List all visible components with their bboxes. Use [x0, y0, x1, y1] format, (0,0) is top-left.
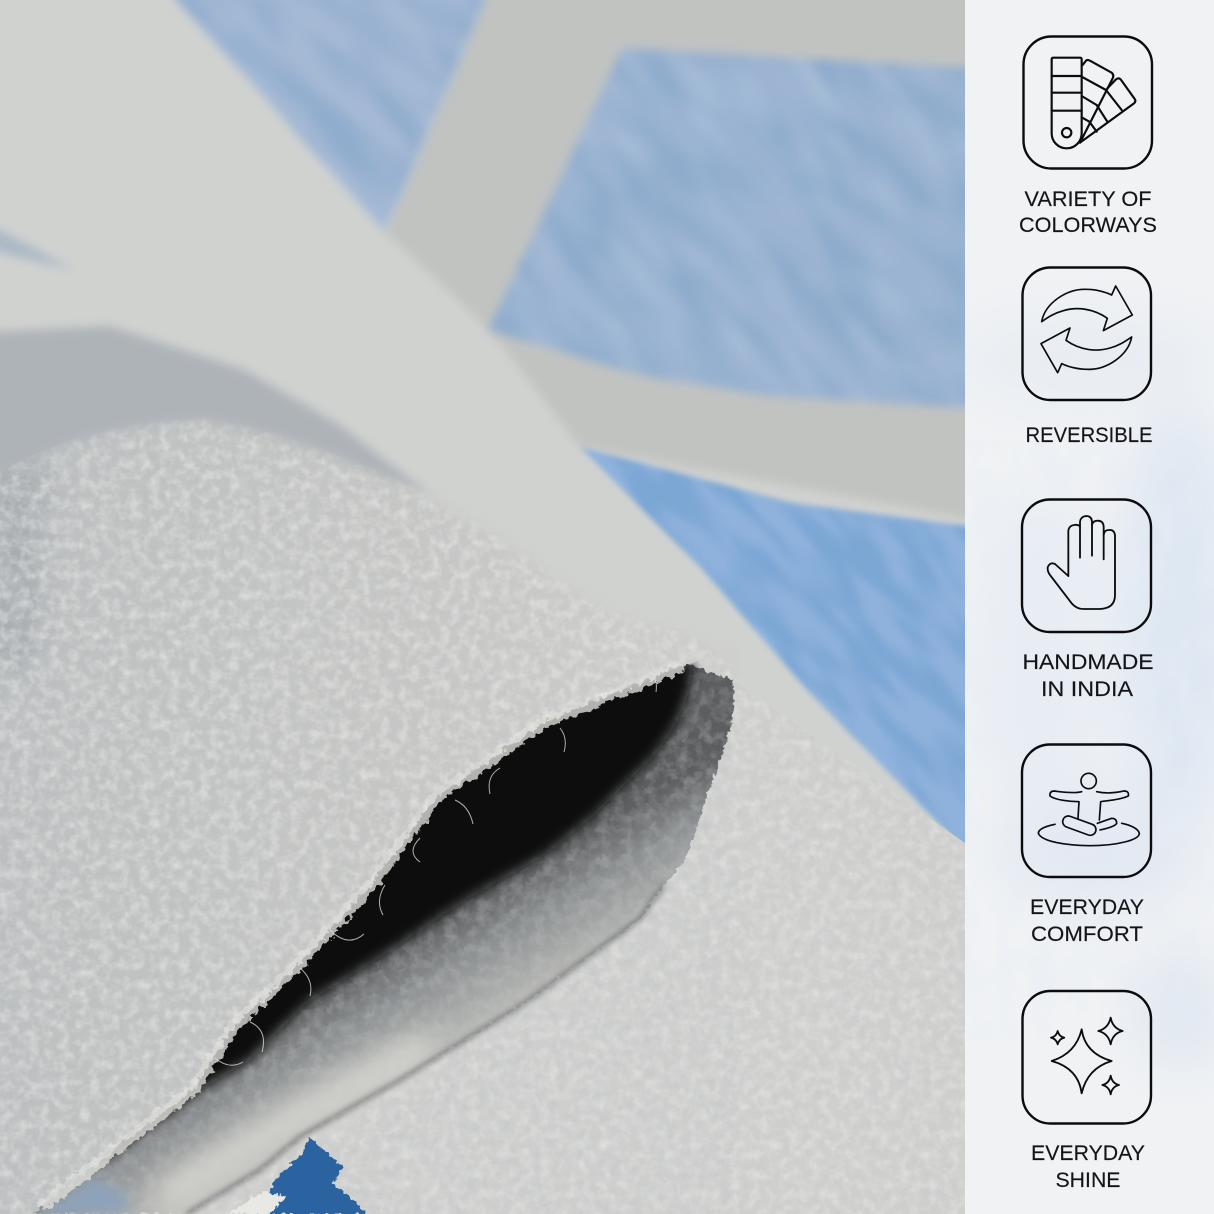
icon: colour fan deck [1052, 58, 1135, 148]
label [1031, 1142, 1145, 1192]
panel background [965, 0, 1214, 1214]
feature: reversible [1022, 268, 1152, 447]
label: COMFORT [1031, 923, 1143, 946]
pale blue patch at the bottom left [38, 1178, 128, 1214]
feature: variety of colorways [1019, 36, 1157, 237]
icon: reversing arrows [1041, 286, 1132, 373]
label: EVERYDAY [1031, 1142, 1145, 1165]
label: VARIETY OF [1024, 188, 1152, 211]
stray fibres on the fold edge [215, 672, 656, 1065]
feature: everyday shine [1022, 991, 1151, 1192]
panel: features sidebar [960, 0, 1214, 1214]
label: SHINE [1056, 1169, 1120, 1192]
large blue diamond [486, 44, 965, 411]
icon frame [1022, 268, 1151, 400]
label: EVERYDAY [1030, 896, 1144, 919]
top blue diamond [170, 0, 489, 232]
contact shadow under the band [187, 885, 664, 1214]
fold shading on the left [0, 450, 45, 680]
label: HANDMADE [1022, 651, 1154, 674]
feature: handmade in india [1022, 500, 1154, 701]
label: COLORWAYS [1019, 214, 1157, 237]
folded rug corner [0, 400, 740, 1214]
icon: open hand [1048, 516, 1115, 609]
icon frame [1022, 500, 1151, 632]
fold surface [0, 400, 740, 1214]
icon: seated meditation figure [1038, 773, 1139, 846]
grey lattice bands [0, 0, 1000, 525]
underside band of the fold [0, 650, 734, 1214]
label: REVERSIBLE [1026, 424, 1152, 447]
dark hollow of the fold [90, 660, 692, 1170]
rug base surface [0, 0, 965, 1214]
lower rug layer [211, 700, 965, 1214]
label [1030, 896, 1144, 946]
blurred upper rug pattern [0, 0, 965, 518]
lower blue diamond [580, 446, 965, 843]
rug photograph [0, 0, 965, 1214]
label [1022, 651, 1154, 701]
light wool along the band's lower left [170, 1050, 420, 1195]
icon frame [1022, 744, 1151, 877]
fold weave texture [0, 400, 740, 1214]
navy motif at bottom edge [227, 1137, 367, 1214]
grey zone behind the fold [0, 323, 422, 490]
label [1019, 188, 1157, 237]
icon frame [1022, 991, 1151, 1124]
label: IN INDIA [1041, 678, 1133, 701]
feature: everyday comfort [1022, 744, 1151, 946]
icon frame [1024, 36, 1152, 168]
icon: sparkles [1051, 1018, 1123, 1094]
panel mottled wash [1008, 414, 1214, 1058]
